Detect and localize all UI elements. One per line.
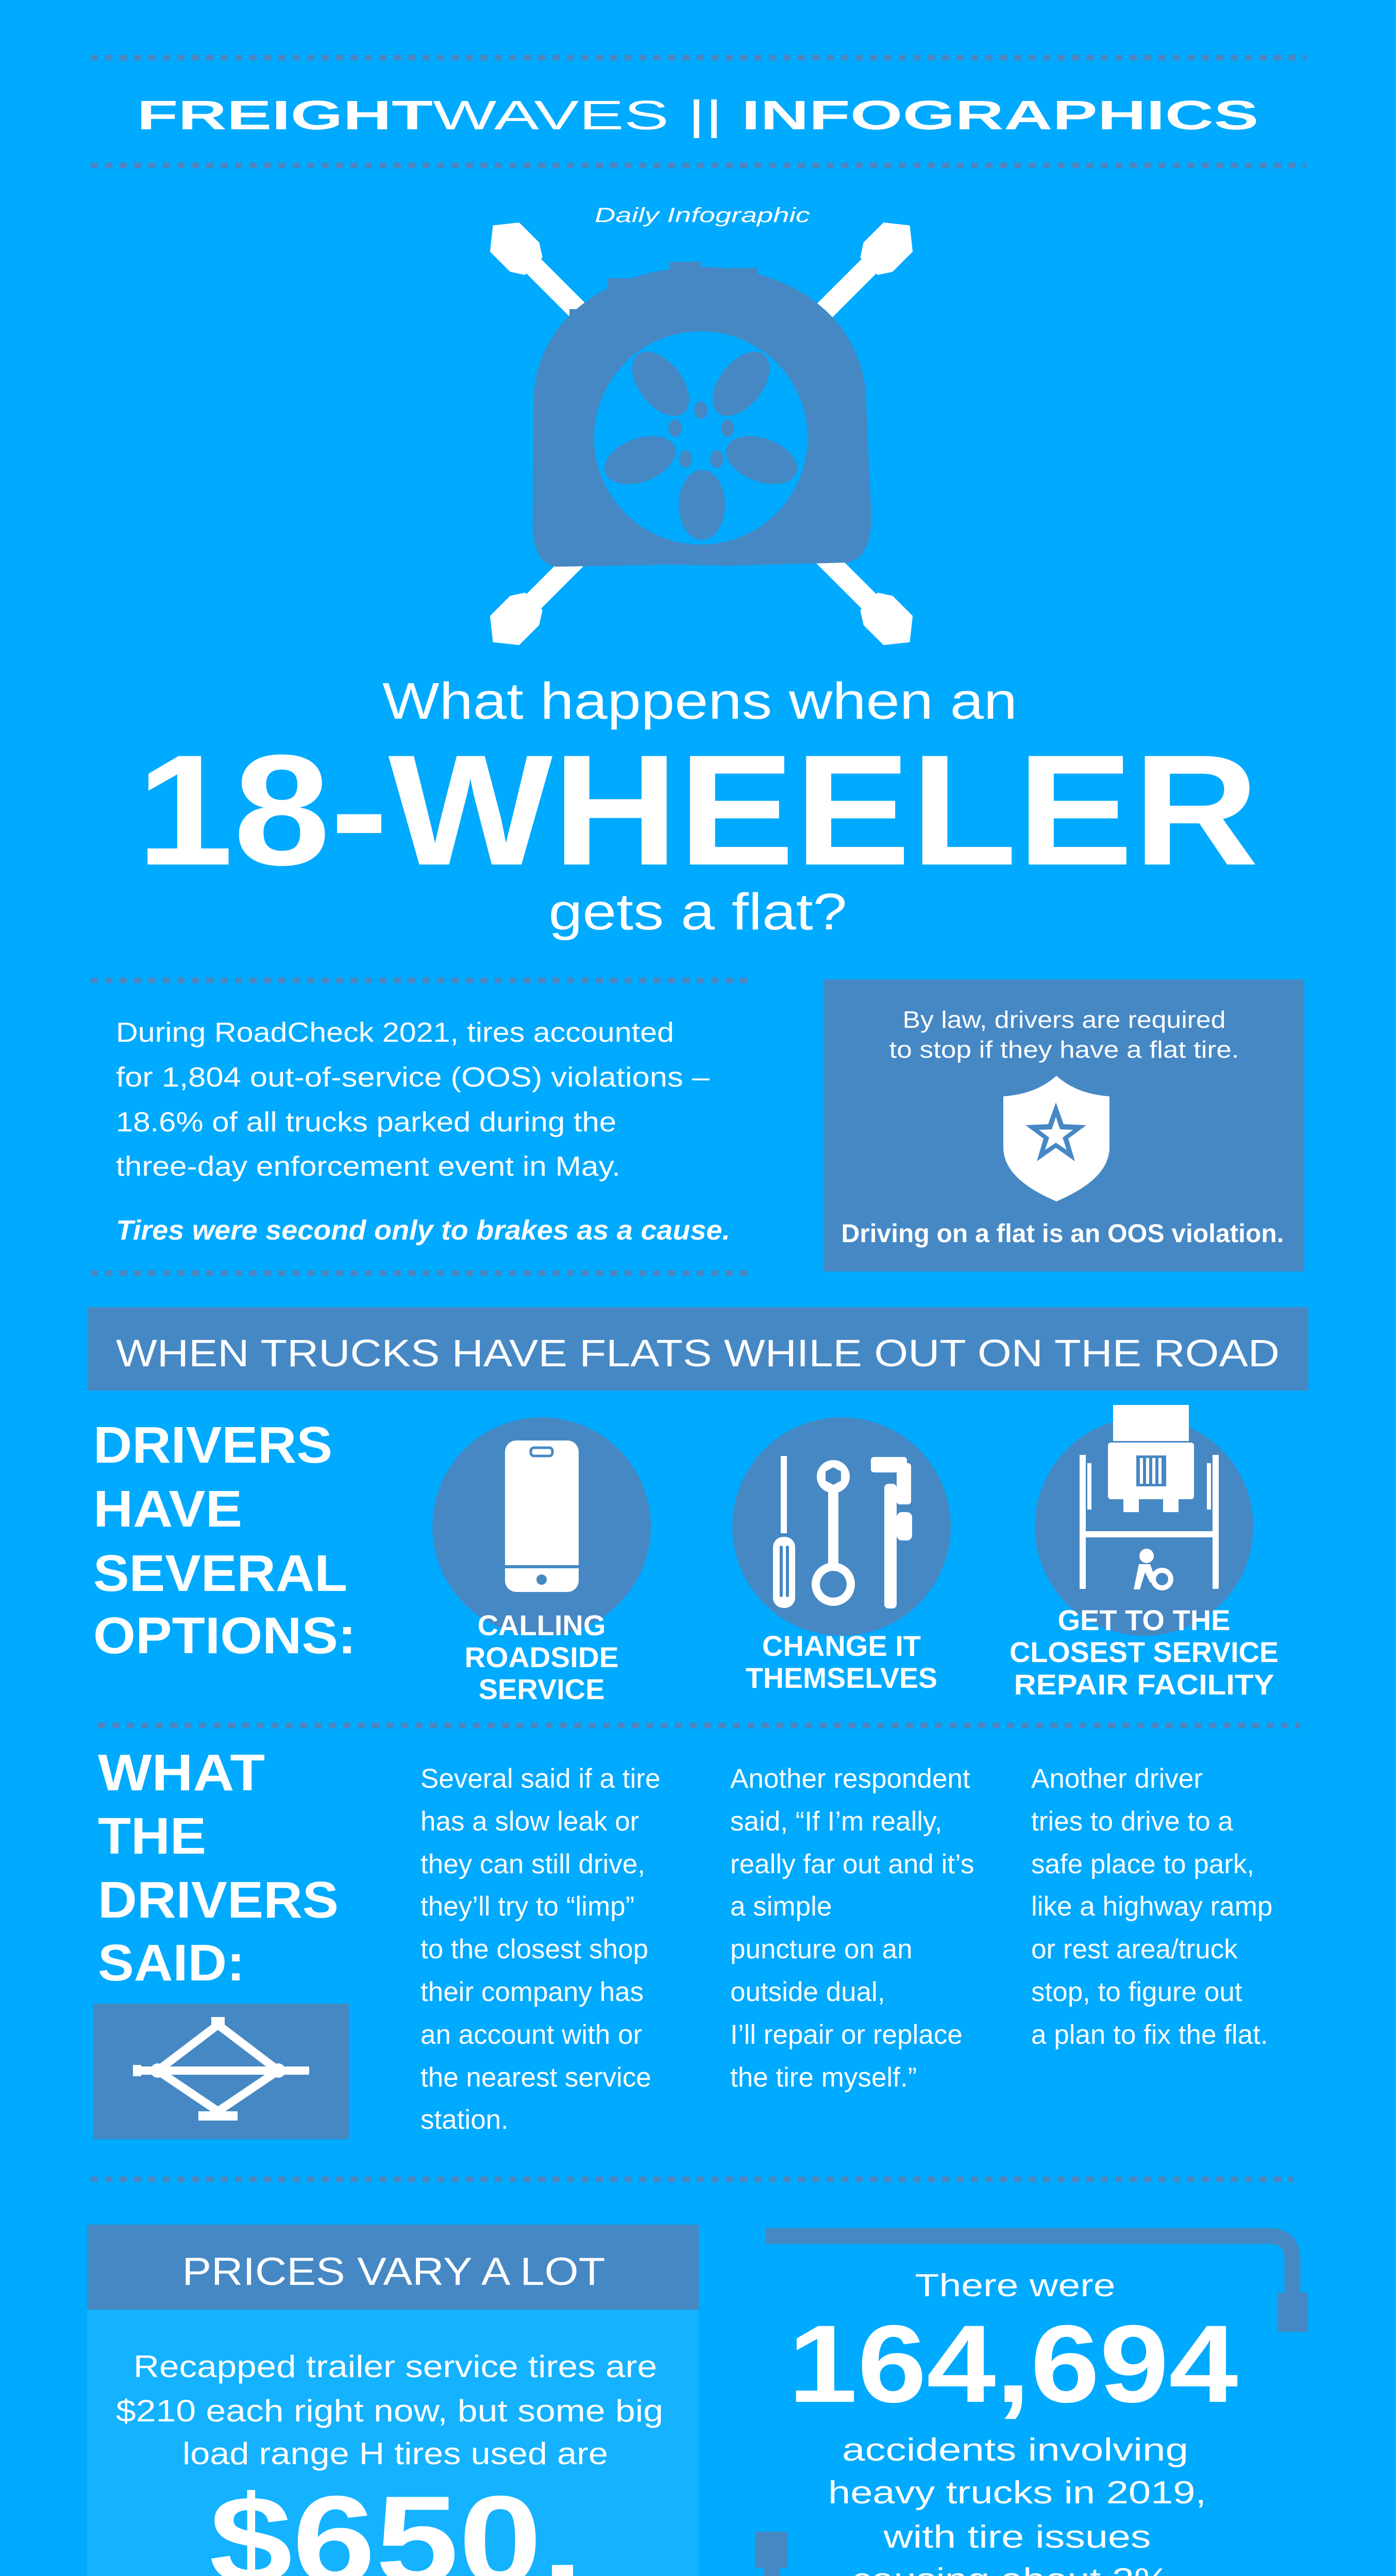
quote column 1: Several said if a tire: [421, 1764, 660, 1794]
quote column 1: to the closest shop: [421, 1934, 648, 1964]
icon: scissor jack: [93, 2004, 349, 2139]
quote column 3: [1031, 1764, 1272, 2050]
quote column 2: outside dual,: [730, 1977, 885, 2007]
icon: phone: [505, 1440, 579, 1592]
option: calling roadside service: ROADSIDE: [465, 1641, 618, 1673]
quote column 2: Another respondent: [730, 1764, 970, 1794]
option: change it themselves: [732, 1417, 951, 1694]
heading: what the drivers said: DRIVERS: [98, 1871, 339, 1929]
panel: prices vary a lot: Recapped trailer service tires are: [133, 2349, 657, 2384]
panel: law callout: By law, drivers are required: [903, 1006, 1225, 1033]
subtitle: daily infographic: Daily Infographic: [595, 204, 810, 227]
quote column 2: the tire myself.”: [730, 2062, 917, 2093]
panel: accidents statistic with bracket: There were: [915, 2268, 1115, 2303]
option: calling roadside service: [432, 1417, 651, 1705]
quote column 2: [730, 1764, 974, 2093]
quote column 2: said, “If I’m really,: [730, 1806, 942, 1837]
panel: prices vary a lot: load range H tires used are: [182, 2436, 608, 2471]
heading: drivers have several options: HAVE: [93, 1480, 242, 1538]
option: get to service repair facility: [1010, 1405, 1279, 1701]
banner: when trucks have flats: [88, 1307, 1308, 1391]
option: get to service repair facility: GET TO THE: [1057, 1604, 1231, 1636]
heading: what the drivers said: [98, 1744, 339, 1992]
panel: accidents statistic with bracket: with tire issues: [883, 2519, 1151, 2555]
panel: accidents statistic with bracket: 164,694: [788, 2302, 1238, 2426]
panel: accidents statistic with bracket: [755, 2236, 1307, 2576]
quote column 3: safe place to park,: [1031, 1849, 1254, 1879]
quote column 2: I’ll repair or replace: [730, 2020, 963, 2050]
headline: What happens when an: [382, 672, 1017, 730]
quote column 1: they’ll try to “limp”: [421, 1891, 634, 1922]
icon: truck on lift: [1080, 1405, 1219, 1590]
text block: roadcheck statistics: Tires were second only to brakes as a cause.: [116, 1215, 730, 1246]
quote column 1: their company has: [421, 1977, 644, 2007]
headline: gets a flat?: [548, 883, 847, 941]
quote column 3: a plan to fix the flat.: [1031, 2020, 1268, 2050]
option: calling roadside service: CALLING: [478, 1609, 606, 1641]
quote column 1: they can still drive,: [421, 1849, 645, 1879]
panel: prices vary a lot: $210 each right now, but some big: [116, 2394, 663, 2428]
quote column 2: puncture on an: [730, 1934, 913, 1964]
heading: drivers have several options: SEVERAL: [93, 1545, 347, 1602]
quote column 2: a simple: [730, 1891, 832, 1922]
header title: FREIGHT WAVES || INFOGRAPHICS: [137, 92, 1258, 138]
heading: what the drivers said: SAID:: [98, 1934, 245, 1992]
heading: drivers have several options: [93, 1416, 356, 1665]
quote column 3: tries to drive to a: [1031, 1806, 1233, 1837]
text block: roadcheck statistics: 18.6% of all trucks parked during the: [116, 1107, 616, 1138]
heading: drivers have several options: OPTIONS:: [93, 1607, 356, 1665]
panel: law callout: [823, 979, 1304, 1272]
text block: roadcheck statistics: During RoadCheck 2021, tires accounted: [116, 1017, 674, 1048]
panel: accidents statistic with bracket: accidents involving: [842, 2432, 1188, 2468]
text block: roadcheck statistics: three-day enforcement event in May.: [116, 1151, 620, 1182]
option: get to service repair facility: REPAIR FACILITY: [1014, 1668, 1274, 1701]
option: calling roadside service: SERVICE: [479, 1673, 604, 1705]
quote column 3: Another driver: [1031, 1764, 1203, 1794]
quote column 1: has a slow leak or: [421, 1806, 639, 1837]
quote column 1: the nearest service: [421, 2062, 651, 2093]
icon: shield with star: [1003, 1076, 1109, 1201]
panel: accidents statistic with bracket: heavy trucks in 2019,: [828, 2475, 1206, 2511]
quote column 1: station.: [421, 2105, 509, 2135]
panel: law callout: to stop if they have a flat tire.: [889, 1036, 1239, 1063]
quote column 3: or rest area/truck: [1031, 1934, 1238, 1964]
headline: 18-WHEELER: [137, 722, 1259, 898]
quote column 1: an account with or: [421, 2020, 642, 2050]
icon: tools: [773, 1456, 912, 1608]
text block: roadcheck statistics: for 1,804 out-of-service (OOS) violations –: [116, 1062, 710, 1093]
banner: when trucks have flats: WHEN TRUCKS HAVE FLATS WHILE OUT ON THE ROAD: [116, 1332, 1280, 1375]
quote column 3: stop, to figure out: [1031, 1977, 1242, 2007]
text block: roadcheck statistics: [116, 1017, 730, 1246]
quote column 1: [421, 1764, 660, 2135]
option: change it themselves: THEMSELVES: [746, 1662, 937, 1694]
option: change it themselves: CHANGE IT: [762, 1630, 921, 1662]
headline: [137, 672, 1259, 941]
option: get to service repair facility: CLOSEST SERVICE: [1010, 1636, 1279, 1668]
panel: prices vary a lot: PRICES VARY A LOT: [182, 2250, 605, 2294]
heading: what the drivers said: WHAT: [98, 1744, 265, 1802]
heading: what the drivers said: THE: [98, 1807, 206, 1865]
heading: drivers have several options: DRIVERS: [93, 1416, 332, 1474]
quote column 2: really far out and it’s: [730, 1849, 974, 1879]
panel: law callout: Driving on a flat is an OOS violation.: [841, 1219, 1284, 1248]
panel: prices vary a lot: [87, 2225, 699, 2576]
quote column 3: like a highway ramp: [1031, 1891, 1272, 1922]
icon: flat tire with crossed wrenches: [478, 211, 924, 657]
